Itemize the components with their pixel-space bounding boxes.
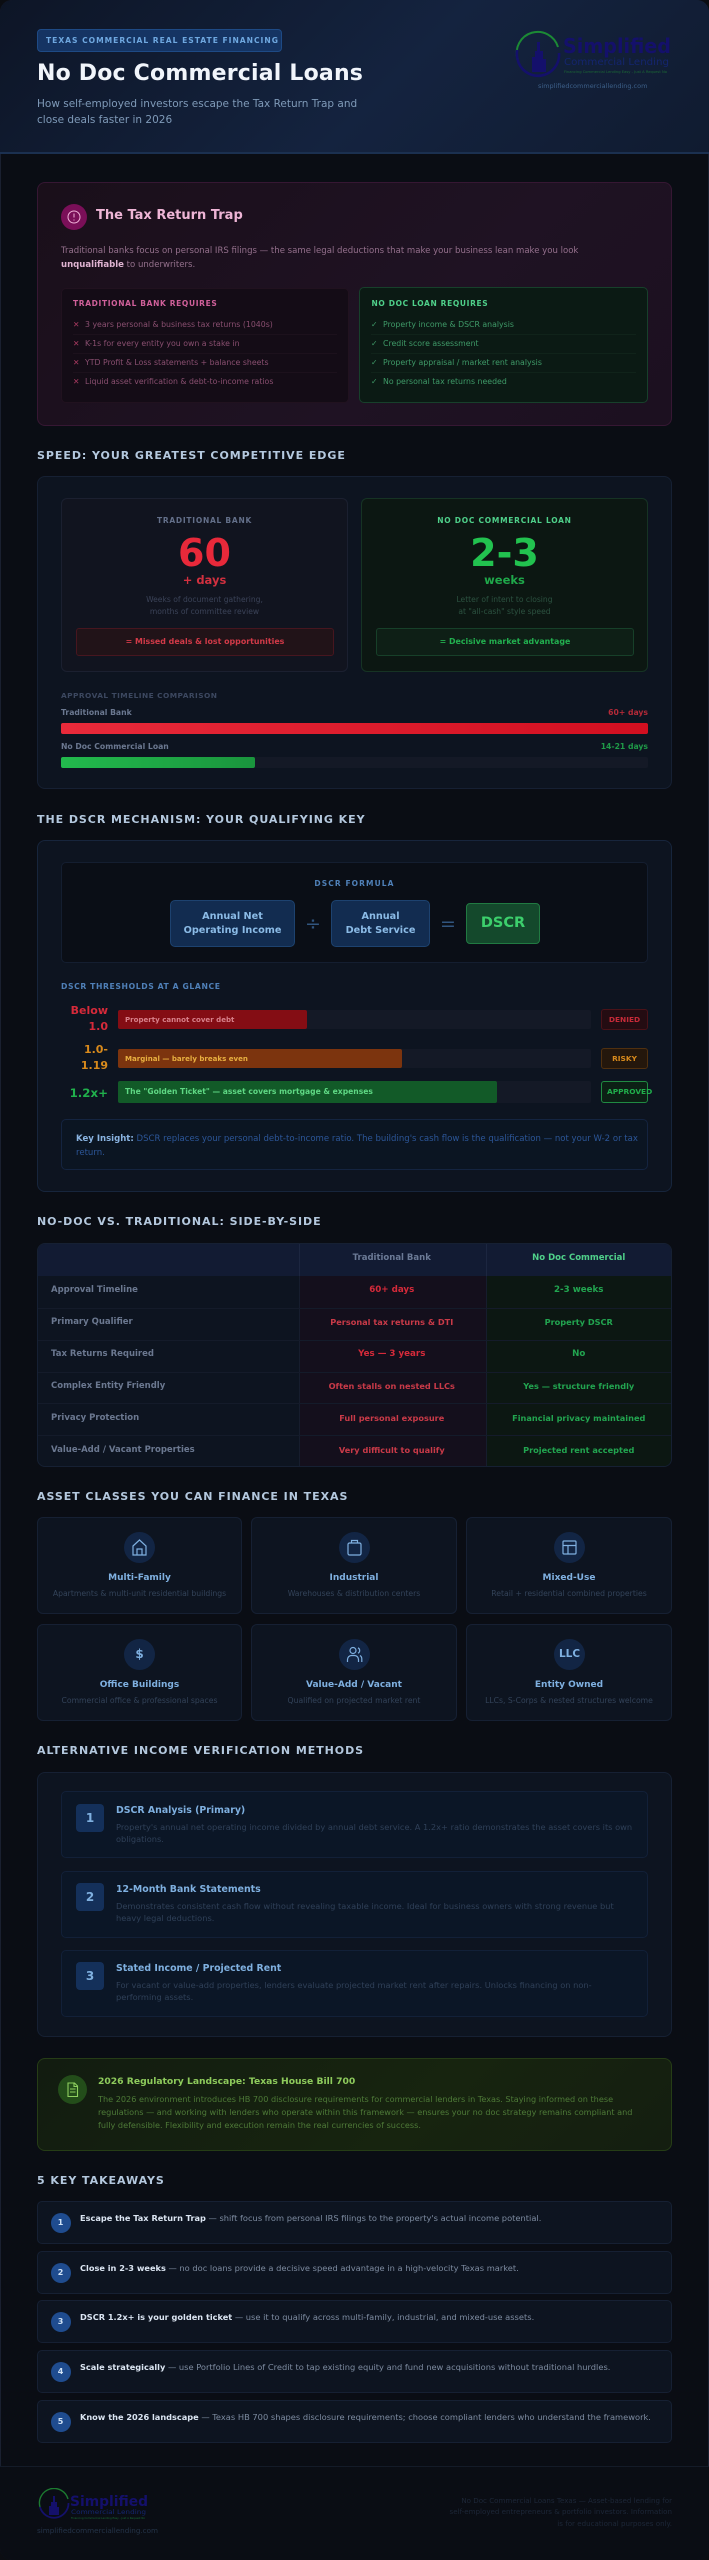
trap description: unqualifiable to underwriters. [61,260,195,270]
method 2 number [76,1883,104,1911]
traditional column tint [298,1276,486,1468]
bar: no doc [61,756,648,768]
heading: the tax return trap: The Tax Return Trap [96,208,243,223]
table text: No Doc Commercial [532,1253,625,1263]
section heading: dscr: THE DSCR MECHANISM: YOUR QUALIFYING KEY [37,812,366,826]
description: Qualified on projected market rent [288,1696,420,1705]
takeaway 4: Scale strategically — use Portfolio Lines of Credit to tap existing equity and fund new acquisitions without traditional hurdles. [80,2362,610,2372]
description: Letter of intent to closing [456,595,553,604]
description: Weeks of document gathering, [146,595,263,604]
comparison table [37,1242,672,1466]
takeaway 5 [37,2400,672,2443]
subtitle: How self-employed investors escape the Tax Return Trap and [37,98,357,110]
takeaway 3: 3 [58,2317,63,2326]
takeaway 2 [37,2251,672,2294]
category badge [37,29,282,52]
threshold value: Below [71,1004,108,1017]
list: no doc loan: ✓ [371,377,377,386]
logo [516,30,671,78]
threshold value: 1.0- [84,1043,108,1056]
method 2 description: heavy legal deductions. [116,1913,214,1923]
method 3 description [116,1980,592,2002]
unit: weeks [484,573,525,587]
table text: Financial privacy maintained [512,1413,645,1423]
card: entity owned [466,1624,672,1721]
takeaway 3 [37,2300,672,2343]
bar label no doc: No Doc Commercial Loan [61,742,169,751]
thresholds heading: DSCR THRESHOLDS AT A GLANCE [61,982,221,991]
result: DSCR: DSCR [481,915,525,931]
outcome callout: = Missed deals & lost opportunities [126,637,284,646]
threshold: risky [81,1043,648,1072]
big number 2-3: 2-3 [470,531,539,575]
timeline comparison: 60+ days [608,708,648,717]
heading: traditional bank requires: TRADITIONAL BANK REQUIRES [73,299,217,308]
card: industrial [251,1517,457,1614]
threshold: denied [71,1004,648,1033]
table text: Full personal exposure [339,1413,444,1423]
table text: Complex Entity Friendly [51,1381,165,1391]
card: no doc loan requires [359,287,648,403]
description: Warehouses & distribution centers [288,1589,420,1598]
card label: NO DOC COMMERCIAL LOAN [437,516,572,525]
footer logo: Simplified [70,2494,148,2510]
status badge [601,1081,648,1103]
table text: 60+ days [369,1285,414,1295]
icon: LLC [554,1639,585,1670]
method 2 description [116,1901,614,1923]
list: no doc loan: ✓ [371,320,377,329]
status badge: DENIED [609,1015,640,1024]
list: no doc loan: ✓ [371,339,377,348]
table text: Often stalls on nested LLCs [329,1381,455,1391]
title: Mixed-Use [543,1573,595,1583]
takeaway 1 [37,2201,672,2244]
table text: Primary Qualifier [51,1317,133,1327]
status badge: APPROVED [607,1087,652,1096]
logo: Commercial Lending [564,57,669,68]
table text: No [572,1349,585,1359]
category badge: TEXAS COMMERCIAL REAL ESTATE FINANCING [46,36,279,45]
panel: speed [37,476,672,789]
title: Industrial [330,1573,378,1583]
threshold value [81,1043,108,1072]
status badge: RISKY [612,1054,637,1063]
outcome callout [76,628,334,656]
takeaway 5: 5 [58,2416,63,2426]
subtitle [37,98,357,126]
description: Commercial office & professional spaces [62,1696,217,1705]
divide sign: ÷ [305,913,321,935]
description: Apartments & multi-unit residential buildings [53,1589,226,1598]
section heading: asset classes: ASSET CLASSES YOU CAN FINANCE IN TEXAS [37,1490,348,1503]
list: traditional bank: ✕ [73,358,79,367]
operand: debt service [331,900,430,947]
icon: briefcase [339,1532,370,1563]
regulatory callout [37,2058,672,2150]
description [456,595,553,616]
card: office buildings [37,1624,242,1721]
list: traditional bank: K-1s for every entity you own a stake in [85,339,240,348]
takeaway 4 [37,2350,672,2393]
card: traditional bank requires [61,288,349,403]
description: at "all-cash" style speed [458,606,551,616]
method 1 card [61,1791,648,1858]
list: traditional bank: YTD Profit & Loss statements + balance sheets [85,358,269,367]
table text: Privacy Protection [51,1413,139,1423]
footer url: simplifiedcommerciallending.com [37,2526,158,2535]
table text: Yes — 3 years [358,1349,425,1359]
footer disclaimer [450,2496,672,2528]
footer logo: Commercial Lending [71,2508,146,2516]
trap description: Traditional banks focus on personal IRS filings — the same legal deductions that make your business lean make you look [61,246,578,256]
table text: 2-3 weeks [554,1285,603,1295]
table text: Very difficult to qualify [339,1445,445,1455]
bar label traditional: Traditional Bank [61,708,132,717]
header banner [0,0,709,154]
panel: dscr [37,840,672,1192]
title: Entity Owned [535,1680,603,1690]
body: The 2026 environment introduces HB 700 disclosure requirements for commercial lenders in Texas. Staying informed on these [98,2094,613,2104]
method 3 number [76,1962,104,1990]
dscr formula [61,862,648,962]
operand: NOI: Annual Net [202,911,263,922]
takeaway 3: DSCR 1.2x+ is your golden ticket — use it to qualify across multi-family, industrial, and mixed-use assets. [80,2312,534,2322]
table text: Yes — structure friendly [523,1381,634,1391]
operand: NOI [170,900,295,947]
key insight: Key Insight: DSCR replaces your personal debt-to-income ratio. The building's cash flow is the qualification — not your W-2 or tax [76,1134,638,1144]
icon: people [339,1639,370,1670]
threshold bar [118,1081,591,1103]
table text: Personal tax returns & DTI [330,1317,453,1327]
operand: NOI: Operating Income [184,925,281,936]
website url: simplifiedcommerciallending.com [538,82,647,90]
heading: no doc loan requires: NO DOC LOAN REQUIRES [372,299,488,308]
method 1 number: 1 [86,1811,94,1825]
card: no doc speed [361,498,648,672]
footer [0,2466,709,2560]
status badge [601,1009,648,1030]
threshold: approved [70,1081,652,1103]
icon: document [58,2075,87,2104]
method 1 description [116,1822,632,1844]
list: traditional bank: 3 years personal & business tax returns (1040s) [85,320,273,329]
list: no doc loan: ✓ [371,358,377,367]
footer disclaimer: is for educational purposes only. [557,2518,672,2528]
key insight: return. [76,1148,105,1158]
method 3 description: performing assets. [116,1992,193,2002]
threshold bar: Property cannot cover debt [125,1015,234,1024]
icon: LLC: LLC [559,1648,580,1660]
description [146,595,263,616]
icon: layout [554,1532,585,1563]
big number 60: 60 [178,531,231,575]
method 2 description: Demonstrates consistent cash flow without revealing taxable income. Ideal for business owners with strong revenue but [116,1901,614,1911]
method 1 number [76,1804,104,1832]
list: no doc loan [371,320,636,386]
operand: debt service: Annual [361,911,400,922]
list: no doc loan: Property appraisal / market rent analysis [383,358,542,367]
list: no doc loan: No personal tax returns needed [383,377,507,386]
table text: Approval Timeline [51,1285,138,1295]
footer disclaimer: No Doc Commercial Loans Texas — Asset-based lending for [461,2496,672,2504]
description: Retail + residential combined properties [491,1589,647,1598]
list: traditional bank: Liquid asset verification & debt-to-income ratios [85,377,273,386]
no doc column tint [486,1276,673,1468]
body [98,2094,632,2130]
card: traditional bank speed [61,498,348,672]
method 3 description: For vacant or value-add properties, lenders evaluate projected market rent after repairs. Unlocks financing on non- [116,1980,592,1990]
panel: alternative income [37,1772,672,2036]
footer logo [38,2488,148,2520]
status badge [601,1048,648,1069]
table text: Value-Add / Vacant Properties [51,1445,195,1455]
timeline comparison: 14-21 days [601,742,648,751]
footer logo: Financing Commercial Lending Easy - Just A Request No [71,2516,145,2520]
title: Value-Add / Vacant [306,1680,402,1690]
result: DSCR [466,903,540,944]
list: no doc loan: Property income & DSCR analysis [383,320,514,329]
threshold bar: The "Golden Ticket" — asset covers mortgage & expenses [125,1087,373,1096]
table text: Tax Returns Required [51,1349,154,1359]
method 1 description: obligations. [116,1834,164,1844]
takeaway 1: Escape the Tax Return Trap — shift focus from personal IRS filings to the property's actual income potential. [80,2213,541,2223]
method 3 card [61,1950,648,2017]
footer disclaimer: self-employed entrepreneurs & portfolio investors. Information [450,2507,672,2516]
outcome callout [376,628,634,656]
timeline comparison [61,691,648,768]
method 1 description: Property's annual net operating income divided by annual debt service. A 1.2x+ ratio demonstrates the asset covers its own [116,1822,632,1832]
trap description [61,246,578,270]
icon: alert circle [61,204,87,230]
icon: dollar [124,1639,155,1670]
method 2 card [61,1871,648,1938]
takeaway 4: 4 [58,2366,63,2376]
threshold bar [118,1010,591,1029]
card: value-add [251,1624,457,1721]
body: regulations — and working with lenders who operate within this framework — ensures your no doc strategy remains compliant and [98,2107,632,2117]
section heading: comparison: NO-DOC VS. TRADITIONAL: SIDE-BY-SIDE [37,1215,322,1228]
timeline heading: APPROVAL TIMELINE COMPARISON [61,691,217,700]
unit: + days [183,573,226,587]
equals sign: = [440,913,456,935]
threshold value: 1.19 [81,1059,108,1072]
takeaway 1: 1 [58,2218,63,2227]
method 3 title: Stated Income / Projected Rent [116,1963,281,1974]
subtitle: close deals faster in 2026 [37,114,172,126]
table text: Projected rent accepted [523,1445,634,1455]
table header [38,1244,673,1276]
panel: tax return trap [37,182,672,426]
icon: dollar: $ [135,1647,144,1661]
icon: house [124,1532,155,1563]
threshold bar: Marginal — barely breaks even [125,1054,248,1063]
method 1 title: DSCR Analysis (Primary) [116,1805,245,1816]
method 2 title: 12-Month Bank Statements [116,1884,261,1895]
table text: Traditional Bank [353,1253,431,1263]
operand: debt service: Debt Service [346,925,415,936]
list: traditional bank: ✕ [73,339,79,348]
card: mixed-use [466,1517,672,1614]
title: 2026 Regulatory Landscape: Texas House Bill 700 [98,2076,355,2087]
formula label: DSCR FORMULA [314,879,395,888]
card label: TRADITIONAL BANK [157,516,252,525]
description: months of committee review [150,606,259,616]
title: Multi-Family [108,1573,171,1583]
table text [51,1253,645,1455]
takeaway 2: Close in 2-3 weeks — no doc loans provide a decisive speed advantage in a high-velocity Texas market. [80,2262,519,2272]
threshold value: 1.0 [88,1020,108,1033]
section heading: key takeaways: 5 KEY TAKEAWAYS [37,2174,165,2186]
bar: traditional [61,722,648,734]
description: LLCs, S-Corps & nested structures welcome [485,1696,653,1705]
outcome callout: = Decisive market advantage [440,637,570,646]
main title: No Doc Commercial Loans [37,61,363,86]
section heading: speed: SPEED: YOUR GREATEST COMPETITIVE EDGE [37,449,346,462]
logo: Financing Commercial Lending Easy - Just A Request No [564,70,667,74]
title: Office Buildings [100,1680,179,1690]
threshold value: 1.2x+ [70,1086,108,1100]
list: traditional bank [73,320,273,386]
threshold bar [118,1049,591,1068]
takeaway 2: 2 [58,2268,63,2276]
method 3 number: 3 [86,1969,94,1983]
section heading: alternative income: ALTERNATIVE INCOME VERIFICATION METHODS [37,1744,364,1757]
list: no doc loan: Credit score assessment [383,339,479,348]
list: traditional bank: ✕ [73,320,79,329]
key insight [61,1119,648,1170]
threshold value [71,1004,108,1033]
table text: Property DSCR [545,1317,613,1327]
body: fully defensible. Flexibility and execution remain the real currencies of success. [98,2120,421,2130]
card: multi-family [37,1517,242,1614]
method 2 number: 2 [86,1890,94,1904]
list: traditional bank: ✕ [73,377,79,386]
takeaway 5: Know the 2026 landscape — Texas HB 700 shapes disclosure requirements; choose compliant lenders who understand the framework. [80,2412,651,2422]
